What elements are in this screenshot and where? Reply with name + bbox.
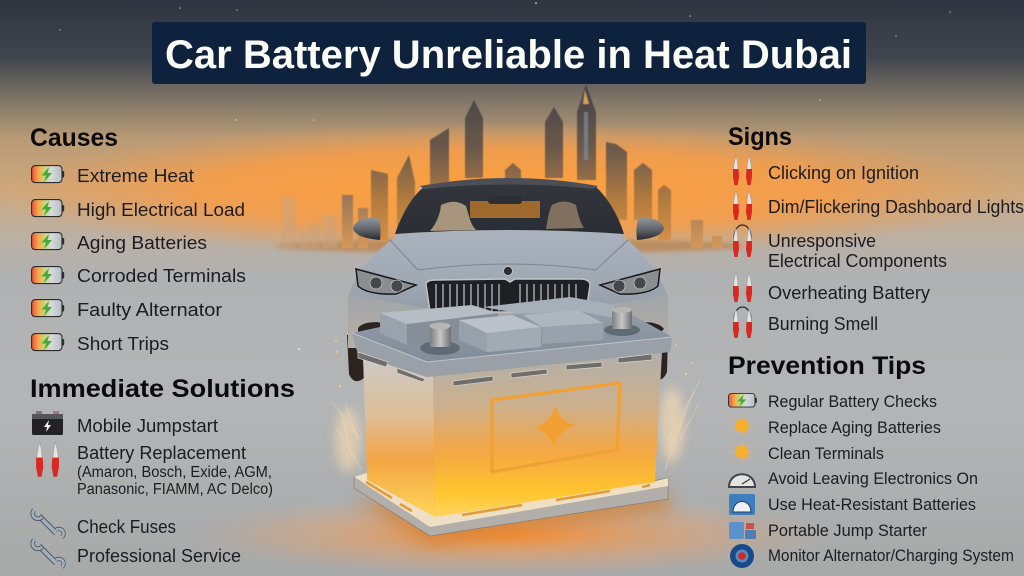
heading: prevention tips: Prevention Tips (728, 352, 926, 380)
item: professional service: Professional Service (77, 545, 241, 566)
car body (348, 178, 668, 345)
hood lines (390, 240, 628, 270)
battery cells (380, 297, 615, 352)
lid vents (358, 352, 652, 386)
headlights (356, 269, 660, 294)
item: check fuses: Check Fuses (77, 516, 176, 537)
item: regular battery checks: Regular Battery Checks (768, 392, 937, 411)
mirrors (353, 218, 664, 240)
item: portable jump starter: Portable Jump Starter (768, 521, 927, 540)
item: replace aging batteries (731, 415, 941, 437)
item: short trips: Short Trips (77, 333, 169, 354)
panel: immediate solutions (30, 375, 295, 567)
heading: immediate solutions: Immediate Solutions (30, 375, 295, 403)
battery base tray (354, 473, 668, 536)
windshield (395, 182, 624, 234)
item: high electrical load: High Electrical Load (77, 199, 245, 220)
panel: causes (30, 124, 246, 354)
battery left face (363, 355, 435, 517)
panel: prevention tips (728, 352, 1014, 568)
item: clean terminals: Clean Terminals (768, 444, 884, 463)
item: professional service (33, 540, 241, 567)
heading: signs: Signs (728, 123, 792, 151)
heading: causes: Causes (30, 124, 118, 152)
item: dim or flickering dashboard lights (733, 191, 1024, 220)
item: battery replacement: (Amaron, Bosch, Exide, AGM, (77, 464, 272, 481)
item: battery replacement: Battery Replacement (77, 442, 246, 463)
title banner (152, 22, 866, 84)
item: battery replacement: Panasonic, FIAMM, AC Delco) (77, 481, 273, 498)
item: monitor alternator or charging system (730, 544, 1014, 568)
item: clicking on ignition: Clicking on Ignition (768, 162, 919, 183)
sparks around battery (332, 340, 700, 472)
item: corroded terminals: Corroded Terminals (77, 265, 246, 286)
item: mobile jumpstart (32, 411, 218, 436)
icon: star on label (535, 405, 577, 449)
battery front face (433, 352, 662, 517)
item: avoid leaving electronics on: Avoid Leaving Electronics On (768, 469, 978, 488)
item: faulty alternator: Faulty Alternator (77, 299, 222, 320)
wheels (347, 335, 668, 381)
item: battery replacement (36, 442, 273, 498)
battery lid (352, 305, 672, 377)
item: extreme heat: Extreme Heat (77, 165, 194, 186)
item: aging batteries: Aging Batteries (77, 232, 207, 253)
item: clean terminals (731, 441, 884, 463)
battery (352, 297, 672, 546)
item: overheating battery (733, 273, 931, 303)
item: use heat-resistant batteries: Use Heat-Resistant Batteries (768, 495, 976, 514)
item: burning smell: Burning Smell (768, 313, 878, 334)
left terminal (420, 322, 460, 355)
item: burning smell (733, 307, 878, 338)
skyline of Dubai (275, 85, 745, 253)
badge (504, 266, 512, 276)
grille (426, 279, 590, 312)
lower intakes (358, 322, 664, 333)
title text: Car Battery Unreliable in Heat Dubai (165, 33, 852, 77)
item: overheating battery: Overheating Battery (768, 282, 931, 303)
battery label plate (492, 383, 620, 472)
item: short trips (32, 333, 169, 354)
item: check fuses (33, 510, 176, 537)
right terminal (604, 307, 640, 336)
item: mobile jumpstart: Mobile Jumpstart (77, 415, 218, 436)
panel: signs (728, 123, 1024, 338)
item: clicking on ignition (733, 156, 919, 185)
item: unresponsive electrical components (733, 225, 947, 271)
item: unresponsive electrical components: Unresponsive (768, 230, 876, 251)
item: replace aging batteries: Replace Aging Batteries (768, 418, 941, 437)
car (347, 178, 668, 381)
item: extreme heat (32, 165, 194, 186)
item: unresponsive electrical components: Electrical Components (768, 250, 947, 271)
view through windshield (470, 201, 540, 218)
battery shadow and floor glow (356, 490, 672, 546)
